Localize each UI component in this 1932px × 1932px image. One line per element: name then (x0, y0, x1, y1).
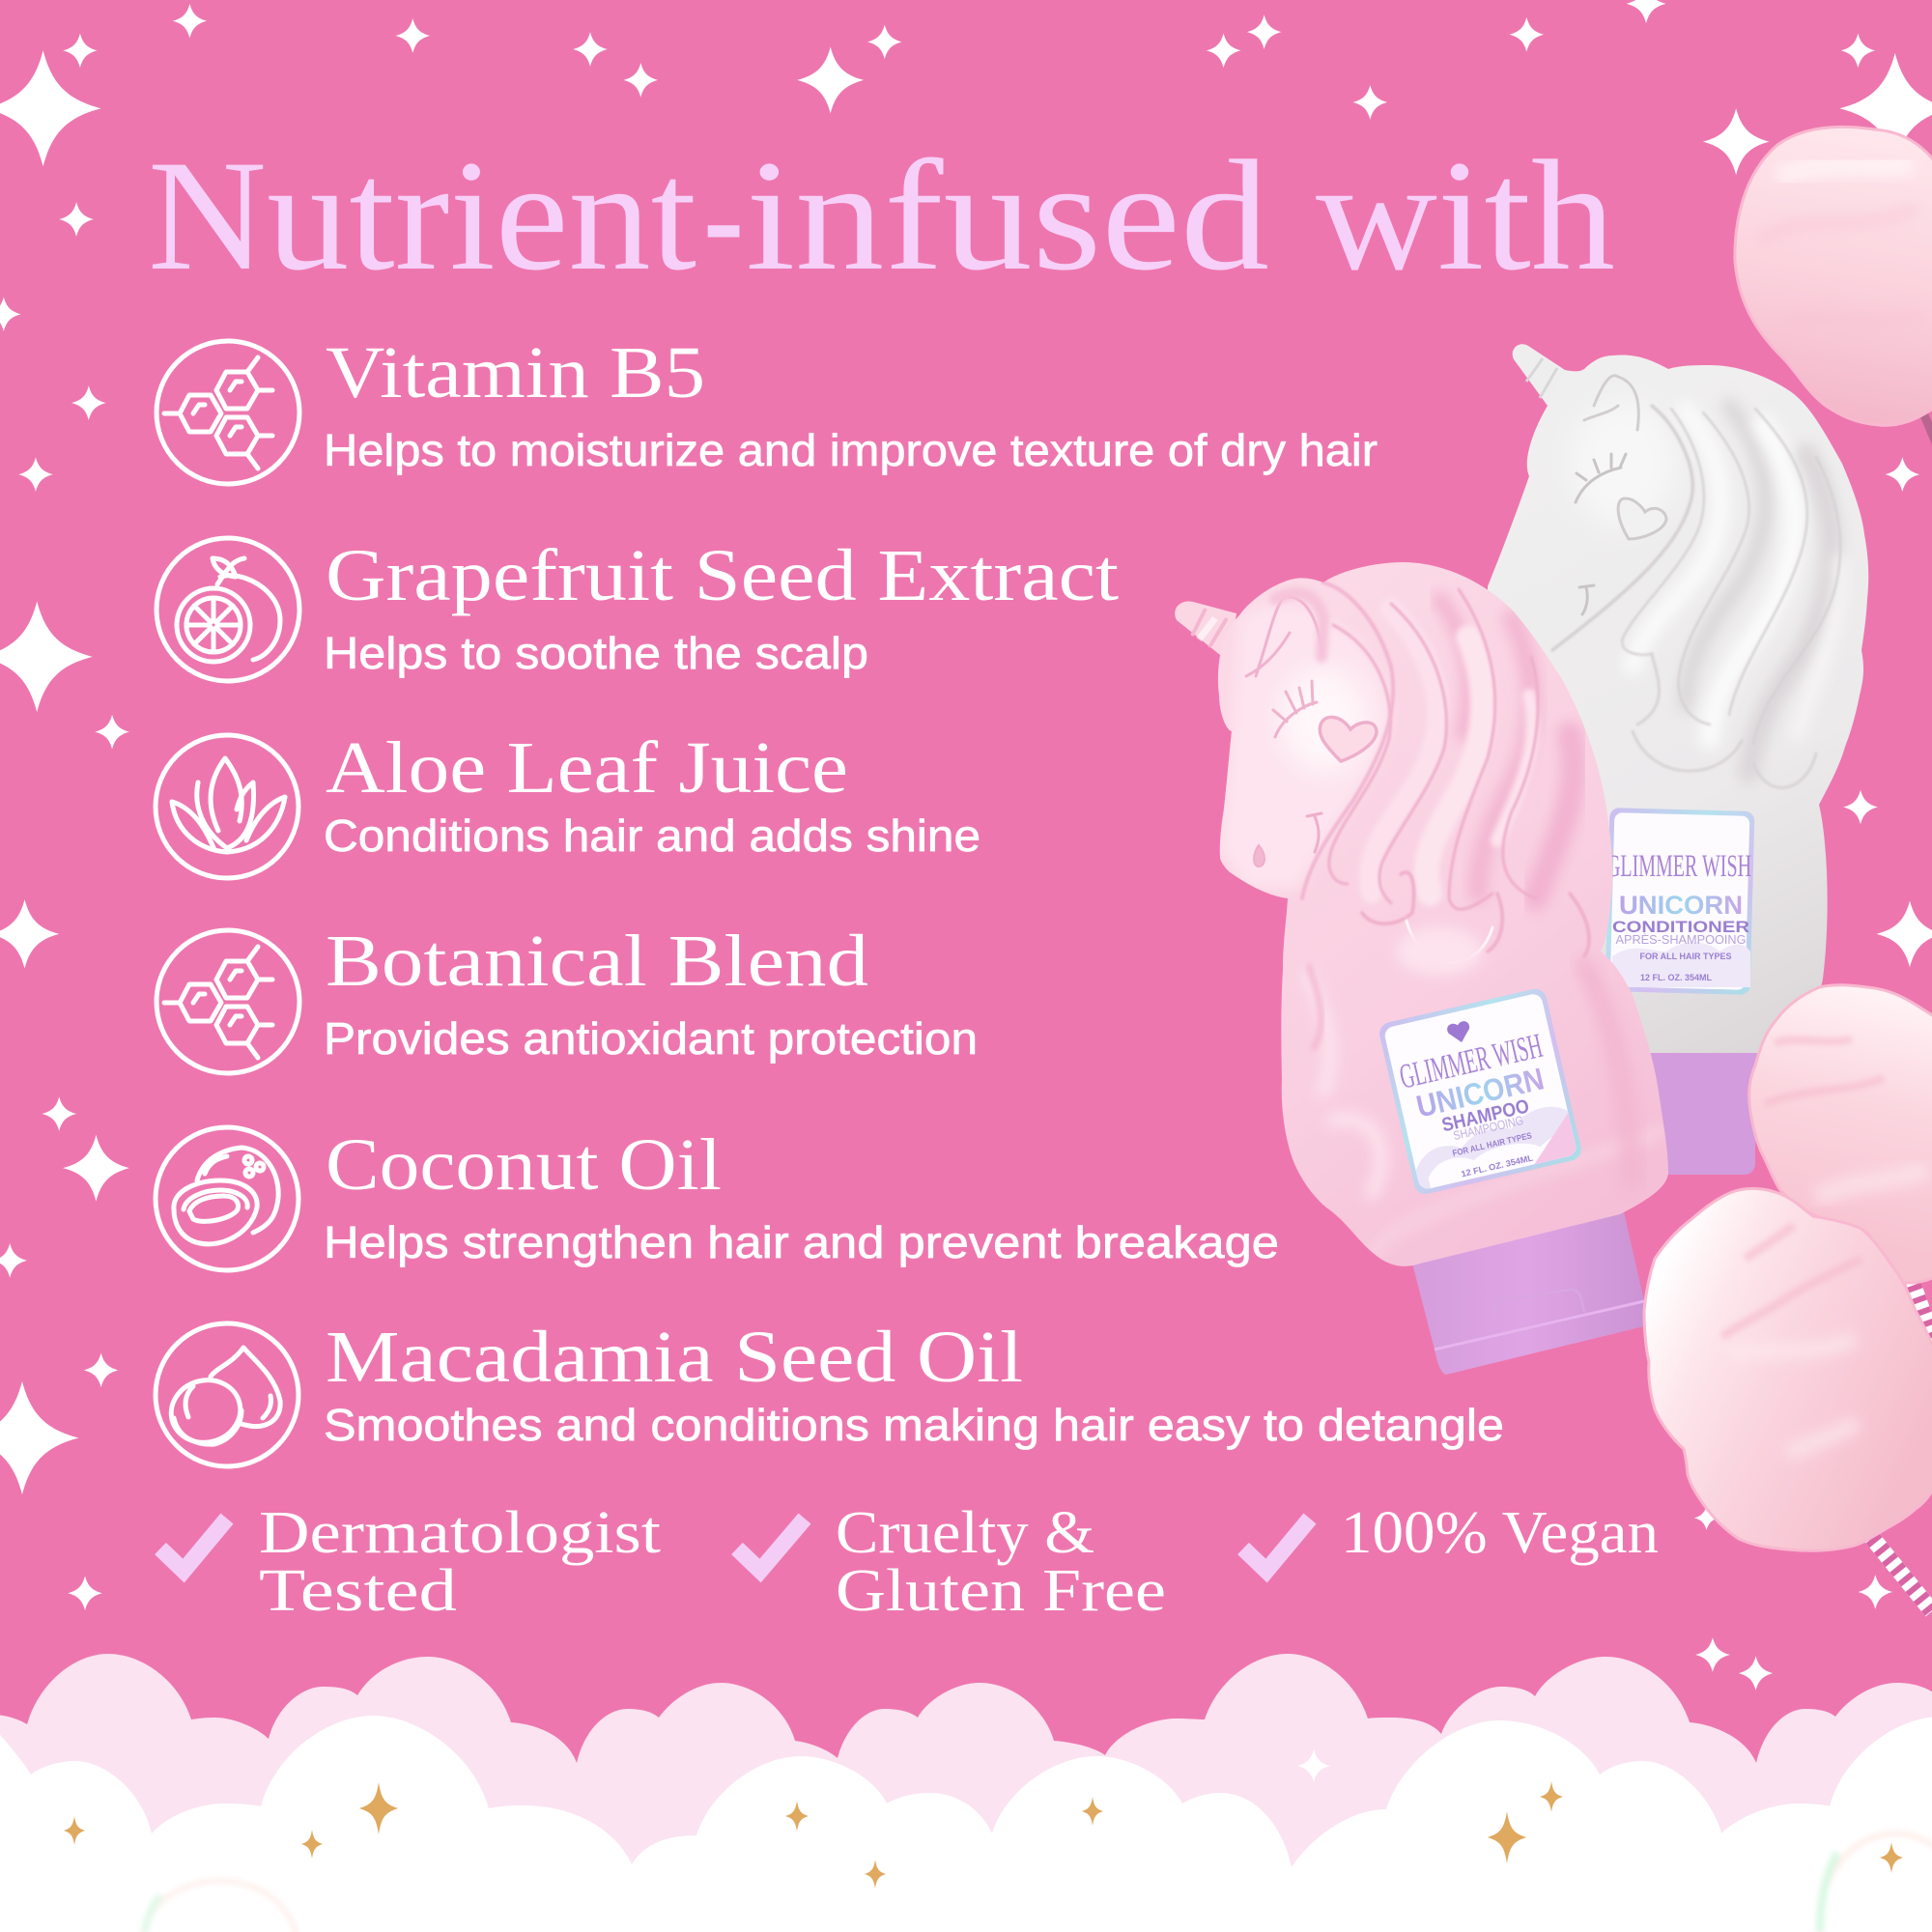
product label: GLIMMER WISH (1396, 1026, 1546, 1096)
ingredient: Botanical Blend (156, 921, 978, 1073)
product label: UNICORN (1619, 891, 1743, 920)
product label: SHAMPOOING (1452, 1113, 1524, 1143)
ingredient: Grapefruit Seed Extract: Grapefruit Seed Extract (326, 535, 1119, 616)
ingredient: Aloe Leaf Juice: Conditions hair and adds shine (324, 810, 980, 861)
icon: molecule (156, 341, 299, 484)
mane shading and face details (1552, 376, 1841, 1014)
front cloud layer (0, 1716, 1932, 1932)
product label: 12 FL. OZ. 354ML (1640, 973, 1713, 982)
ingredient: Aloe Leaf Juice: Aloe Leaf Juice (326, 727, 848, 809)
cotton candy cluster (1644, 127, 1932, 1611)
ingredient: Coconut Oil (156, 1124, 1279, 1270)
gold sparkles (64, 1781, 1903, 1889)
horn (1513, 344, 1565, 406)
icon: check (737, 1519, 805, 1571)
back cloud layer (0, 1654, 1932, 1932)
certification: Cruelty and Gluten Free: Cruelty & (836, 1500, 1094, 1566)
certification: 100% Vegan (1243, 1500, 1659, 1571)
ingredient: Botanical Blend: Botanical Blend (326, 921, 868, 1002)
shampoo bottle (1175, 562, 1668, 1375)
ingredient: Grapefruit Seed Extract: Helps to soothe the scalp (324, 628, 868, 678)
certification: Dermatologist Tested (160, 1500, 661, 1624)
ingredient: Vitamin B5: Helps to moisturize and improve texture of dry hair (324, 425, 1378, 475)
title: with (1316, 128, 1615, 303)
bottle cap (1410, 1208, 1644, 1375)
product label: FOR ALL HAIR TYPES (1639, 952, 1732, 961)
ingredient: Coconut Oil: Helps strengthen hair and prevent breakage (324, 1217, 1279, 1267)
certification: Cruelty and Gluten Free: Gluten Free (836, 1558, 1166, 1624)
icon: check (160, 1519, 227, 1571)
certification: 100% Vegan: 100% Vegan (1341, 1500, 1659, 1566)
icon: check (1243, 1519, 1310, 1571)
icon: grapefruit (156, 538, 299, 681)
ingredient: Coconut Oil: Coconut Oil (326, 1124, 722, 1206)
certification: Cruelty and Gluten Free (737, 1500, 1166, 1624)
product label: 12 FL. OZ. 354ML (1461, 1152, 1534, 1179)
ingredient: Macadamia Seed Oil: Smoothes and conditions making hair easy to detangle (324, 1400, 1504, 1450)
ingredient: Macadamia Seed Oil: Macadamia Seed Oil (326, 1317, 1023, 1398)
cotton candy top (1735, 127, 1932, 425)
title (148, 128, 1615, 303)
cotton candy bottom (1644, 1188, 1932, 1550)
ingredient: Aloe Leaf Juice (156, 727, 980, 878)
soap bubble left (142, 1881, 297, 1932)
soap bubble right (1820, 1833, 1932, 1932)
icon: coconut (156, 1127, 298, 1270)
title: infused (746, 128, 1269, 303)
mane shading and face details (1219, 582, 1662, 1256)
ingredient: Vitamin B5 (156, 332, 1378, 484)
icon: aloe leaves (156, 735, 298, 878)
unicorn body (1488, 355, 1868, 1053)
product label (1605, 808, 1754, 995)
unicorn body (1218, 562, 1668, 1266)
ingredient: Grapefruit Seed Extract (156, 535, 1119, 681)
cotton candy middle (1749, 985, 1932, 1283)
ingredient: Vitamin B5: Vitamin B5 (326, 332, 705, 413)
product label (1378, 986, 1583, 1196)
conditioner bottle (1488, 344, 1868, 1175)
candy sticks (1864, 411, 1932, 1611)
product label: SHAMPOO (1440, 1095, 1531, 1136)
product label: FOR ALL HAIR TYPES (1452, 1130, 1533, 1158)
white sparkle on cloud (1297, 1749, 1330, 1782)
product label: GLIMMER WISH (1606, 849, 1751, 884)
product label: APRÈS-SHAMPOOING (1615, 932, 1747, 947)
certification: Dermatologist Tested: Dermatologist (259, 1500, 661, 1566)
bottle cap (1642, 1048, 1763, 1175)
horn (1175, 601, 1236, 655)
icon: molecule (156, 930, 299, 1073)
ingredient: Botanical Blend: Provides antioxidant protection (324, 1013, 978, 1064)
certification: Dermatologist Tested: Tested (259, 1558, 457, 1624)
ingredient: Macadamia Seed Oil (156, 1317, 1504, 1466)
title: Nutrient (148, 128, 696, 303)
title: - (703, 128, 744, 303)
icon: macadamia (156, 1323, 298, 1466)
product label: UNICORN (1413, 1061, 1548, 1124)
product label: CONDITIONER (1612, 918, 1749, 936)
